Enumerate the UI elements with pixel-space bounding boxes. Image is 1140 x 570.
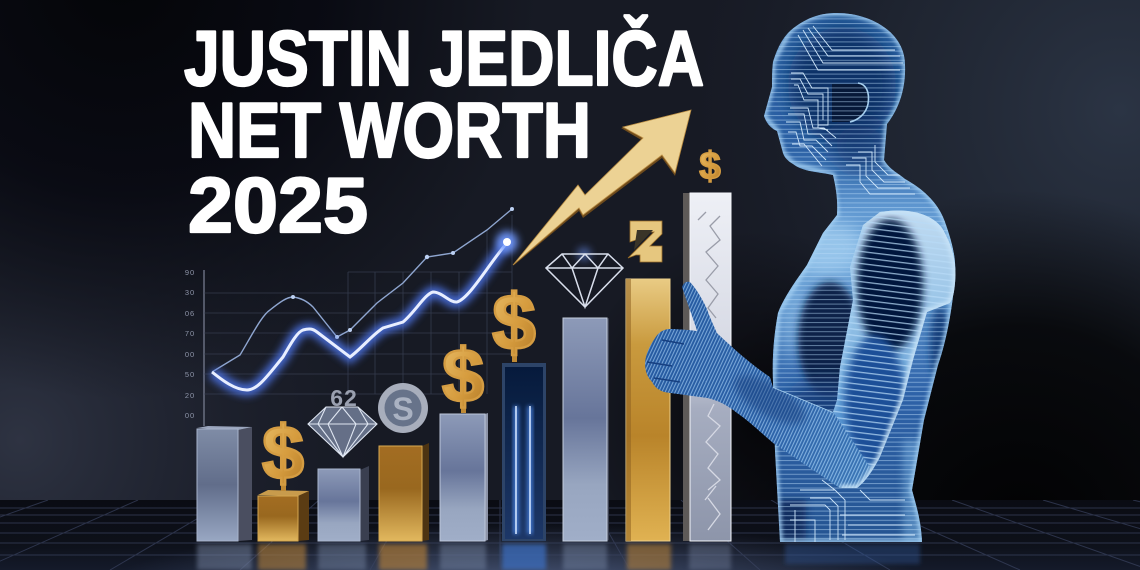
floor grid: [0, 500, 1140, 570]
chart y axis labels: 20: [185, 391, 195, 400]
line chart: [185, 207, 518, 426]
chart y axis labels: 90: [185, 268, 195, 277]
bar 7 silver: [563, 318, 609, 541]
title line 1: JUSTIN JEDLIČA: [184, 14, 704, 102]
bar 9 white zigzag: [683, 193, 731, 541]
figure: circuit traces: [786, 26, 915, 545]
glowing main line: [212, 231, 518, 390]
bar 2 gold: [258, 490, 309, 541]
icon: dollar sign on bar 6: $: [492, 277, 536, 366]
title line 2: NET WORTH: [188, 86, 591, 174]
icon: outline diamond: [546, 247, 623, 307]
bar 8 gold: [626, 279, 670, 541]
icon: dollar sign on bar 5: $: [442, 334, 484, 419]
forearm and hand: [645, 282, 872, 488]
thin trend line: [212, 207, 514, 372]
figure: arm: [645, 210, 956, 488]
chart y axis labels: 00: [185, 350, 195, 359]
chart y axis labels: 00: [185, 411, 195, 420]
title line 3: 2025: [188, 161, 368, 249]
upper arm: [830, 210, 956, 488]
icon: dollar sign on bar 2: $: [262, 411, 304, 496]
chart y axis labels: 50: [185, 370, 195, 379]
arrow: gold lightning growth arrow: [513, 110, 691, 266]
icon: gold Z mark: [628, 221, 662, 262]
chart y axis labels: 30: [185, 288, 195, 297]
icon: silver coin: S: [392, 391, 414, 427]
chart y axis labels: [185, 268, 195, 420]
rim light: [764, 13, 955, 542]
bar 5 silver: [440, 413, 488, 541]
chart y axis labels: 70: [185, 329, 195, 338]
icon: silver coin: [378, 383, 428, 433]
bar 6 neon blue: [502, 363, 546, 541]
head shading: [788, 27, 896, 143]
ear: [832, 84, 869, 122]
bar 4 gold: [379, 443, 429, 541]
figure: finger creases: [647, 340, 684, 382]
figure: blue wireframe person: [645, 13, 956, 542]
arm rim light: [833, 225, 863, 412]
bars: [197, 193, 731, 541]
torso dark core: [798, 282, 862, 398]
bar 1 silver: [197, 426, 252, 541]
figure: head and torso: [764, 13, 956, 542]
chart y axis labels: 06: [185, 309, 195, 318]
icon: crystal diamond with number: 62: [330, 385, 358, 411]
bar 3 silver: [318, 466, 369, 541]
icon: crystal diamond with number: [308, 385, 377, 457]
chest light: [801, 218, 862, 280]
title: [184, 14, 704, 249]
icon: small dollar sign: $: [699, 145, 721, 188]
